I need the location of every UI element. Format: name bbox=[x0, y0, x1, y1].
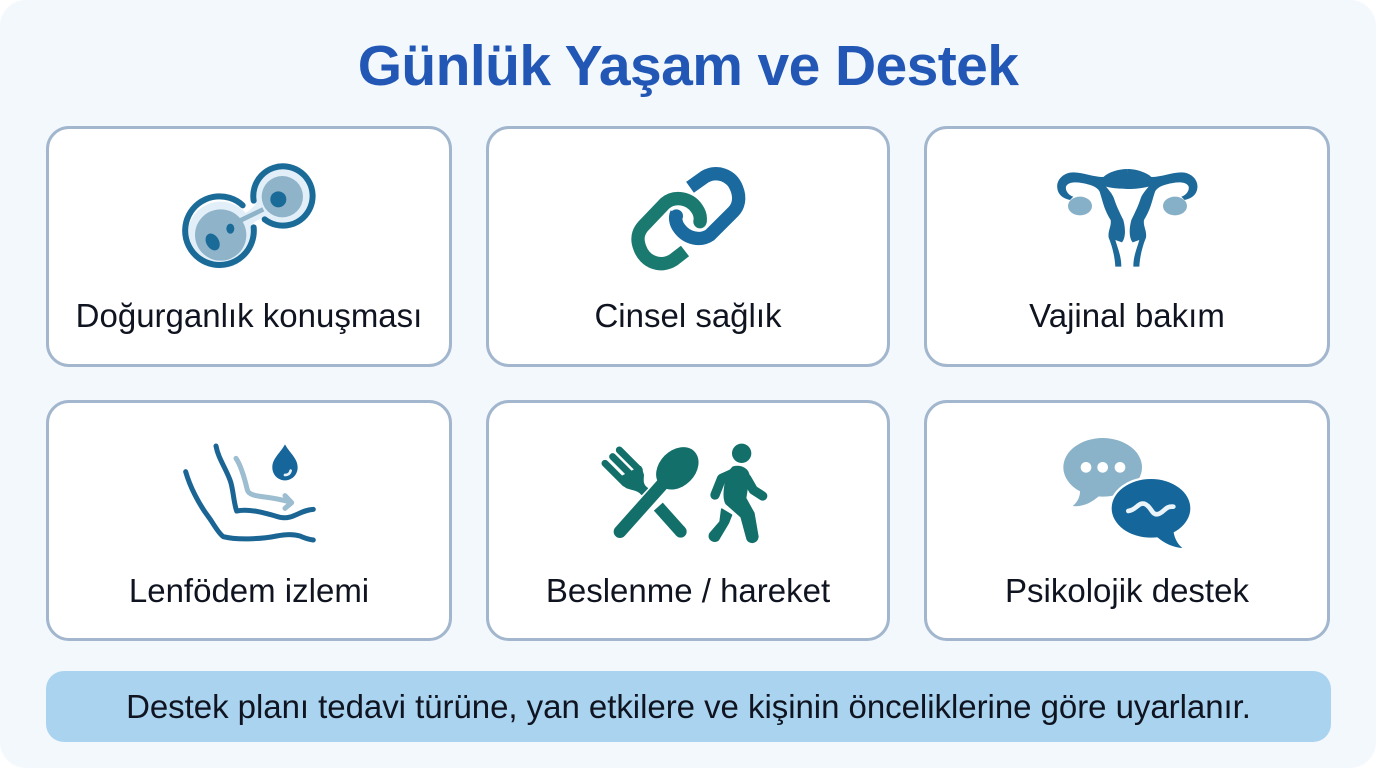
panel: Doğurganlık konuşması bbox=[46, 126, 452, 367]
callout banner bbox=[46, 671, 1331, 742]
panel: Cinsel sağlık bbox=[486, 126, 890, 367]
icon: uterus bbox=[1057, 169, 1198, 267]
label: Doğurganlık konuşması bbox=[76, 297, 422, 334]
icon: chain links bbox=[631, 167, 746, 270]
panel: Vajinal bakım bbox=[924, 126, 1330, 367]
title: Günlük Yaşam ve Destek bbox=[358, 34, 1018, 98]
panel: Psikolojik destek bbox=[924, 400, 1330, 641]
label: Beslenme / hareket bbox=[546, 572, 830, 609]
label: Psikolojik destek bbox=[1005, 572, 1249, 609]
callout banner: Destek planı tedavi türüne, yan etkilere ve kişinin önceliklerine göre uyarlanır. bbox=[126, 688, 1251, 725]
panel: Beslenme / hareket bbox=[486, 400, 890, 641]
panel: Lenfödem izlemi bbox=[46, 400, 452, 641]
icon: fork, spoon and walking person bbox=[602, 444, 768, 544]
icon: two dividing cells bbox=[182, 163, 316, 268]
label: Cinsel sağlık bbox=[594, 297, 782, 334]
icon: speech bubbles bbox=[1063, 438, 1190, 548]
label: Vajinal bakım bbox=[1029, 297, 1225, 334]
icon: arm with lymph drop bbox=[183, 444, 316, 542]
label: Lenfödem izlemi bbox=[129, 572, 369, 609]
